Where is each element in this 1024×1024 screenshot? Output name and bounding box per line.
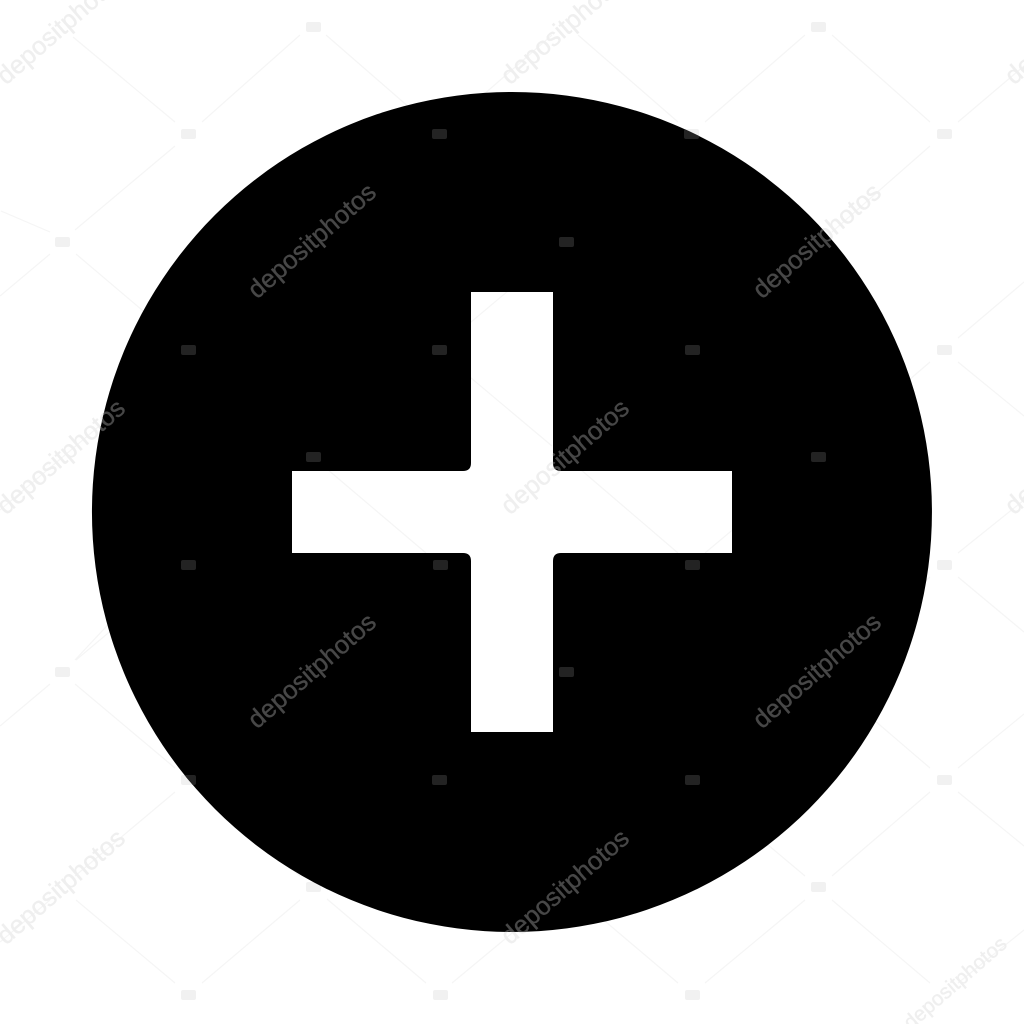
watermarks on white background: depositphotos — [496, 824, 635, 950]
watermarks on black circle: depositphotos — [496, 824, 635, 950]
watermarks on black circle: depositphotos — [748, 178, 887, 304]
watermarks on black circle: depositphotos — [496, 394, 635, 520]
watermarks on black circle: depositphotos — [243, 178, 382, 304]
watermarks on white background: depositphotos — [496, 394, 635, 520]
camera marks on black circle — [181, 129, 826, 785]
watermarks on black circle: depositphotos — [748, 608, 887, 734]
watermarks on black circle: depositphotos — [243, 608, 382, 734]
watermarks on black circle — [0, 178, 887, 950]
icon: black circle with plus cut-out — [92, 92, 932, 932]
watermarks on white background: depositphotos — [748, 178, 887, 304]
